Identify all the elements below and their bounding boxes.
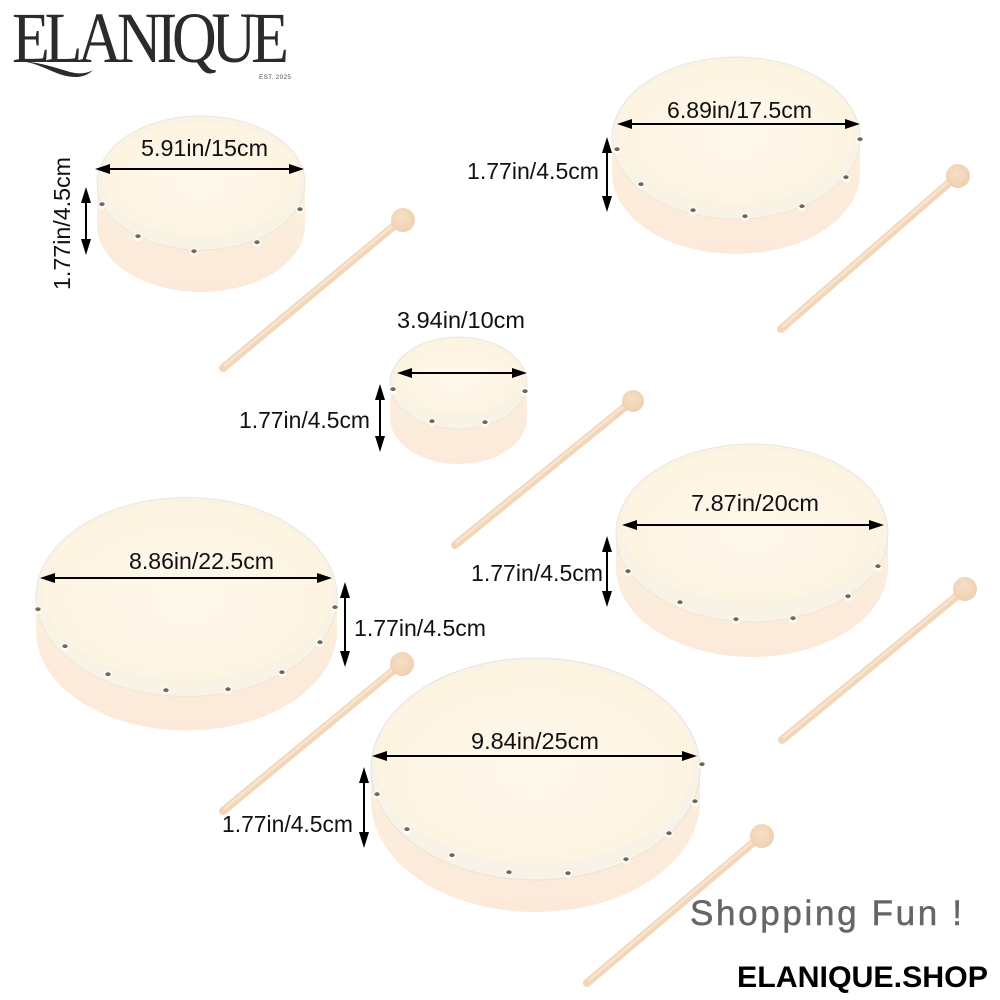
arrow: 9.84in height xyxy=(359,767,369,848)
drum: 5.91in xyxy=(97,116,305,292)
drum: 8.86in xyxy=(34,498,339,730)
height label: 8.86in drum: 1.77in/4.5cm xyxy=(354,615,486,641)
arrow: 8.86in height xyxy=(340,582,350,667)
mallet: 7.87in drum xyxy=(782,577,977,740)
arrow: 6.89in height xyxy=(602,137,612,212)
arrow: 3.94in diameter xyxy=(397,368,527,378)
diameter label: 5.91in/15cm: 5.91in/15cm xyxy=(141,135,268,161)
drum: 6.89in xyxy=(612,57,864,254)
slogan: Shopping Fun !: Shopping Fun ! xyxy=(690,894,962,933)
drum: 3.94in xyxy=(389,337,529,464)
arrow: 7.87in diameter xyxy=(622,520,884,530)
diameter label: 7.87in/20cm: 7.87in/20cm xyxy=(691,490,819,516)
logo: ELANIQUE: EST. 2025 xyxy=(259,74,291,81)
mallet: 8.86in drum xyxy=(223,652,414,811)
diameter label: 8.86in/22.5cm: 8.86in/22.5cm xyxy=(129,548,274,574)
arrow: 7.87in height xyxy=(602,536,612,607)
mallet: 9.84in drum xyxy=(587,824,774,983)
arrow: 8.86in diameter xyxy=(40,573,332,583)
drum: 7.87in xyxy=(616,444,888,657)
diameter label: 3.94in/10cm: 3.94in/10cm xyxy=(397,307,525,333)
arrow: 9.84in diameter xyxy=(372,751,697,761)
mallet: 3.94in drum xyxy=(455,390,644,545)
arrow: 3.94in height xyxy=(375,384,385,452)
arrow: 6.89in diameter xyxy=(617,119,860,129)
arrow: 5.91in diameter xyxy=(95,164,304,174)
height label: vertical 1.77in/4.5cm: 1.77in/4.5cm xyxy=(49,157,75,290)
logo: ELANIQUE: ELANIQUE xyxy=(12,0,289,78)
drum: 9.84in xyxy=(371,658,706,912)
mallet: 5.91in drum xyxy=(223,208,415,368)
arrow: 5.91in height xyxy=(81,187,91,255)
height label: 6.89in drum: 1.77in/4.5cm xyxy=(467,158,599,184)
height label: 7.87in drum: 1.77in/4.5cm xyxy=(471,560,603,586)
diameter label: 6.89in/17.5cm: 6.89in/17.5cm xyxy=(667,97,812,123)
site address: ELANIQUE.SHOP: ELANIQUE.SHOP xyxy=(737,961,988,994)
diameter label: 9.84in/25cm: 9.84in/25cm xyxy=(471,728,599,754)
height label: 9.84in drum: 1.77in/4.5cm xyxy=(222,811,353,837)
mallet: 6.89in drum xyxy=(781,164,970,329)
height label: 3.94in drum: 1.77in/4.5cm xyxy=(239,407,370,433)
